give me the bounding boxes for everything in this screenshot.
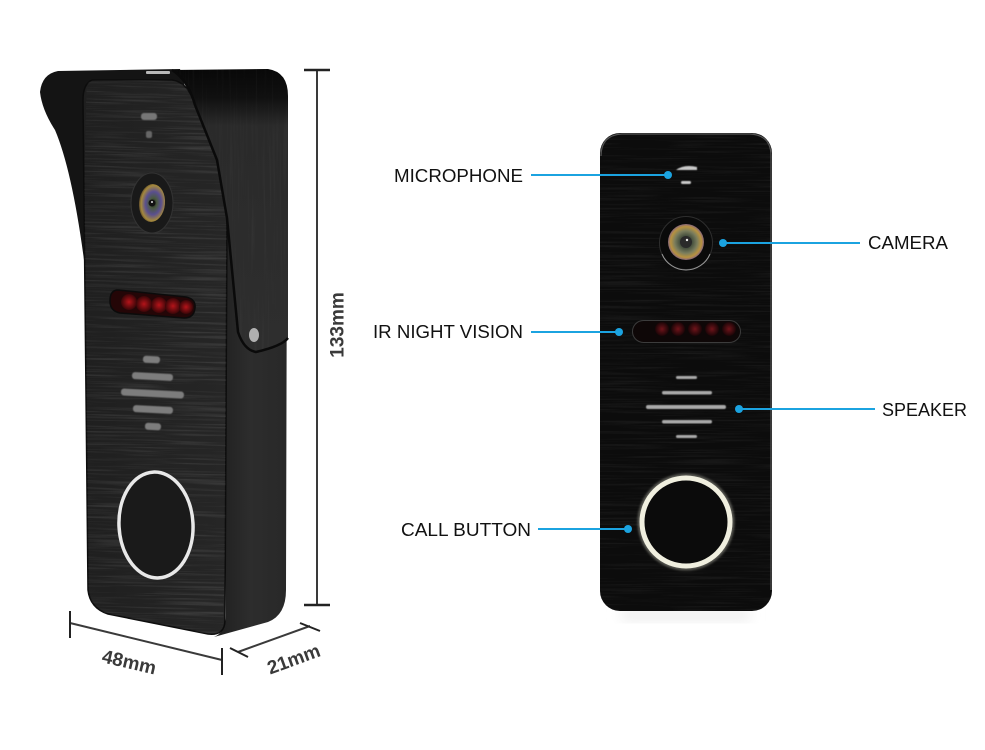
callout: IR night vision (373, 322, 623, 342)
body side panel (214, 200, 287, 637)
hood back shell (40, 69, 225, 330)
hood top glint (146, 71, 170, 74)
indicator hole (146, 131, 152, 138)
callout: call button: CALL BUTTON (401, 520, 531, 540)
dimension: depth 21mm (230, 623, 323, 679)
callout: call button (401, 520, 632, 540)
call button (116, 470, 196, 580)
dimension: width 48mm (70, 611, 222, 679)
infographic canvas (40, 68, 966, 675)
speaker slots (121, 356, 184, 430)
callout: camera: CAMERA (868, 233, 948, 253)
dimension: width 48mm: 48mm (100, 647, 158, 679)
floor reflection (620, 608, 752, 622)
callout: speaker (735, 400, 967, 420)
camera (660, 216, 712, 270)
dimension: height 133mm: 133mm (328, 292, 348, 358)
microphone slots (676, 166, 697, 184)
left device: angled view of doorbell with rain hood (40, 68, 290, 642)
callout: camera (719, 233, 948, 253)
dimension: depth 21mm: 21mm (265, 641, 323, 679)
IR LED window (110, 290, 195, 318)
callout: microphone: MICROPHONE (394, 166, 523, 186)
IR LED window (632, 320, 740, 342)
front plate (82, 80, 228, 635)
callout: speaker: SPEAKER (882, 400, 967, 420)
hood screw (249, 328, 259, 342)
right device: front view of doorbell (600, 133, 772, 622)
hood right flap (170, 68, 290, 358)
callout: microphone (394, 166, 672, 186)
device body (600, 133, 772, 611)
callout: IR night vision: IR NIGHT VISION (373, 322, 523, 342)
call button ring (642, 478, 730, 566)
speaker slots (646, 376, 726, 438)
camera (131, 173, 173, 233)
microphone slot (141, 113, 157, 120)
